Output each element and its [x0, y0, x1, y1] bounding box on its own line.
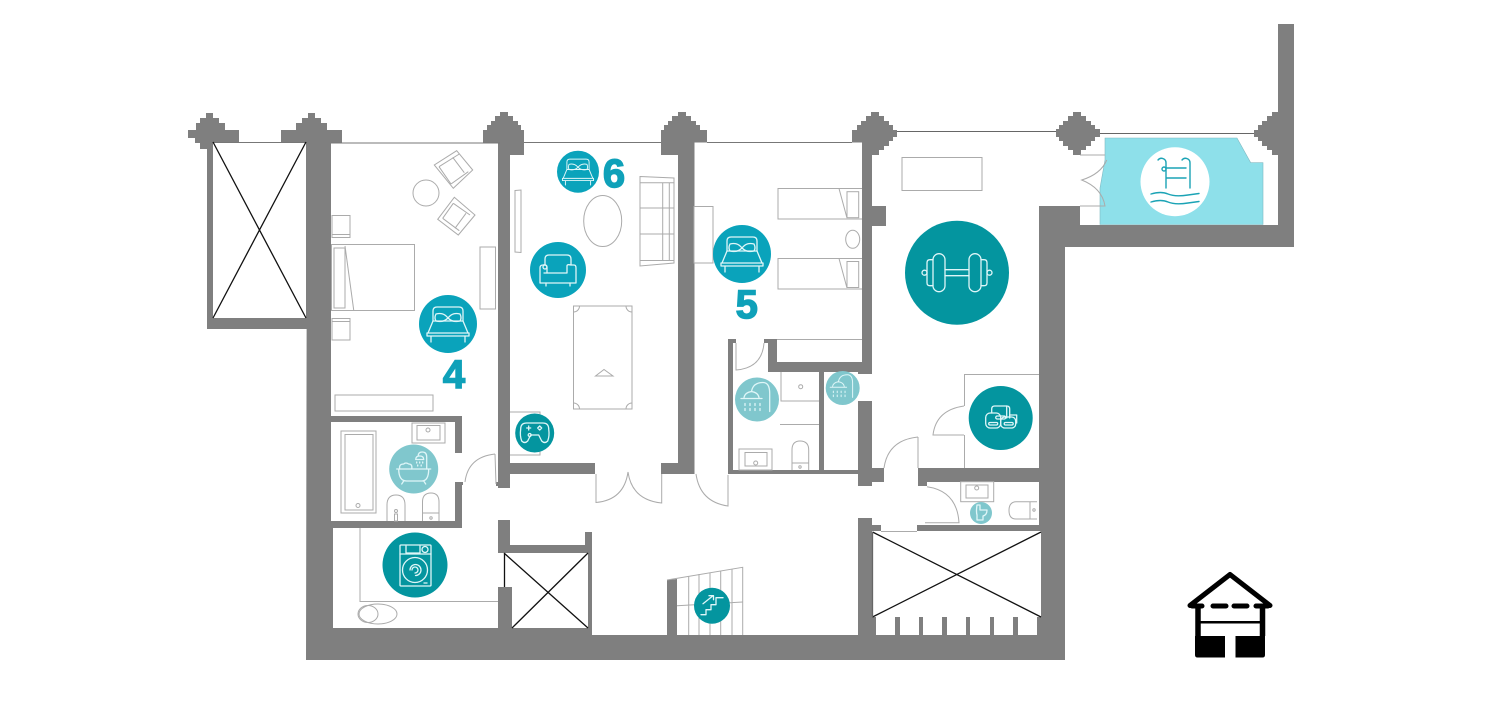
icon: stairs — [694, 588, 730, 624]
outer wall: left, bottom and right to pool — [306, 24, 1294, 660]
shaft cross middle — [504, 553, 588, 628]
floor plan walls — [188, 24, 1294, 660]
number 5: 5 — [736, 283, 758, 327]
number 4: 4 — [443, 353, 466, 397]
icon: shower small — [826, 371, 860, 405]
icon: bed 5 — [713, 225, 771, 283]
pool — [1080, 138, 1263, 224]
pool wall pilasters — [1056, 112, 1100, 155]
furniture: lounge 6 — [510, 176, 674, 455]
icon: bathtub — [389, 444, 438, 494]
pilaster 2 — [281, 113, 342, 142]
wall 4 with pilaster — [764, 112, 897, 374]
furniture: bathroom 4 — [341, 423, 496, 521]
icon: washing machine — [382, 532, 448, 598]
icon: bed 4 — [419, 295, 477, 353]
left shaft frame — [207, 142, 307, 329]
wall 2 with pilaster — [483, 112, 595, 488]
furniture: bedroom 4 — [332, 151, 496, 411]
central bath walls — [728, 339, 884, 486]
furniture: central bathroom — [736, 343, 819, 470]
pilaster 1 — [188, 113, 239, 149]
shaft left stub — [498, 520, 510, 553]
stairs — [667, 567, 743, 635]
furniture: laundry room — [358, 528, 498, 624]
icon: toilet — [970, 502, 992, 524]
icon: bed 6 — [557, 151, 599, 193]
wall 3 with pilaster — [661, 112, 707, 474]
doors: lounge and hall — [596, 437, 918, 506]
bathroom 4 walls — [331, 416, 462, 453]
icon: house level indicator — [1190, 574, 1270, 658]
furniture: small bathroom — [881, 482, 1037, 532]
icon: armchair — [530, 242, 586, 298]
icon: towels — [969, 386, 1033, 450]
icon: gamepad — [515, 414, 554, 452]
furniture: gym and sauna room — [902, 158, 1039, 468]
furniture: bedroom 5 — [694, 188, 862, 340]
thin window lines — [213, 132, 1254, 143]
icon: pool ladder — [1140, 147, 1210, 216]
shaft cross right — [872, 532, 1041, 617]
icon: shower large — [735, 378, 779, 422]
icon: gym dumbbell — [905, 221, 1009, 325]
number 6: 6 — [603, 152, 625, 196]
pool door — [1080, 155, 1107, 206]
shaft cross left — [213, 142, 306, 318]
